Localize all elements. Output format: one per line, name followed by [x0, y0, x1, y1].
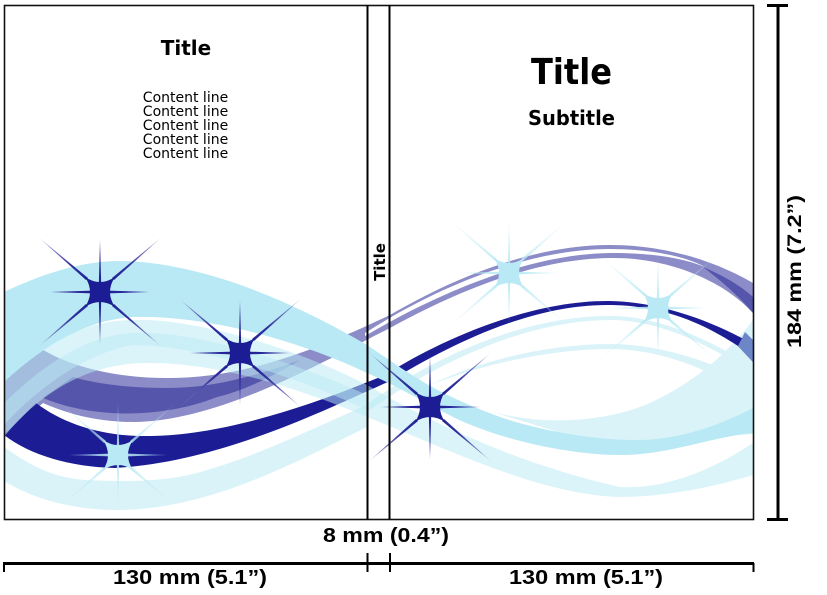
width dimension: 130 mm (5.1”)	[113, 567, 267, 589]
width dimension: 130 mm (5.1”)	[509, 567, 663, 589]
cover frame	[4, 6, 754, 520]
spine left line	[366, 5, 368, 519]
back cover content lines: Content line	[143, 104, 228, 120]
back cover content lines: Content line	[143, 132, 228, 148]
front cover subtitle: Subtitle	[528, 106, 615, 130]
wave: lighter end of dark band, right	[738, 332, 753, 362]
wave: pale lowest band, left	[4, 405, 367, 510]
star: light 5	[456, 226, 562, 323]
wave: pale thin arc, right upper	[367, 316, 753, 412]
star: dark 4	[367, 351, 493, 463]
wave: pale thin arc, right lower	[432, 344, 710, 384]
wave: purple band	[4, 245, 753, 437]
height dimension: 184 mm (7.2”)	[785, 195, 806, 348]
wave: main cyan band	[4, 261, 753, 455]
front cover title: Title	[531, 52, 612, 93]
spine right line	[388, 5, 390, 519]
wave: dark purple core	[43, 360, 300, 413]
wave: medium overlay band over purple	[4, 333, 367, 425]
wave: dark purple tip, right	[703, 267, 753, 313]
back cover content lines	[143, 90, 228, 162]
back cover content lines: Content line	[143, 118, 228, 134]
star: dark 1	[37, 236, 163, 348]
star: light 3	[64, 405, 174, 498]
wave: white gap between purple lines	[365, 249, 705, 336]
back cover content lines: Content line	[143, 90, 228, 106]
wave: dark blue band	[4, 301, 753, 468]
star: dark 2	[177, 297, 303, 409]
back cover title: Title	[161, 36, 211, 60]
spine title: Title	[371, 243, 389, 281]
artwork: waves and stars	[4, 217, 753, 511]
back cover content lines: Content line	[143, 146, 228, 162]
spine width label: 8 mm (0.4”)	[323, 525, 449, 547]
star: light 6	[605, 260, 710, 356]
wave: pale overlay band over purple and dark	[4, 320, 753, 497]
width dimension	[3, 553, 754, 589]
wave: large pale area, right	[480, 320, 753, 445]
